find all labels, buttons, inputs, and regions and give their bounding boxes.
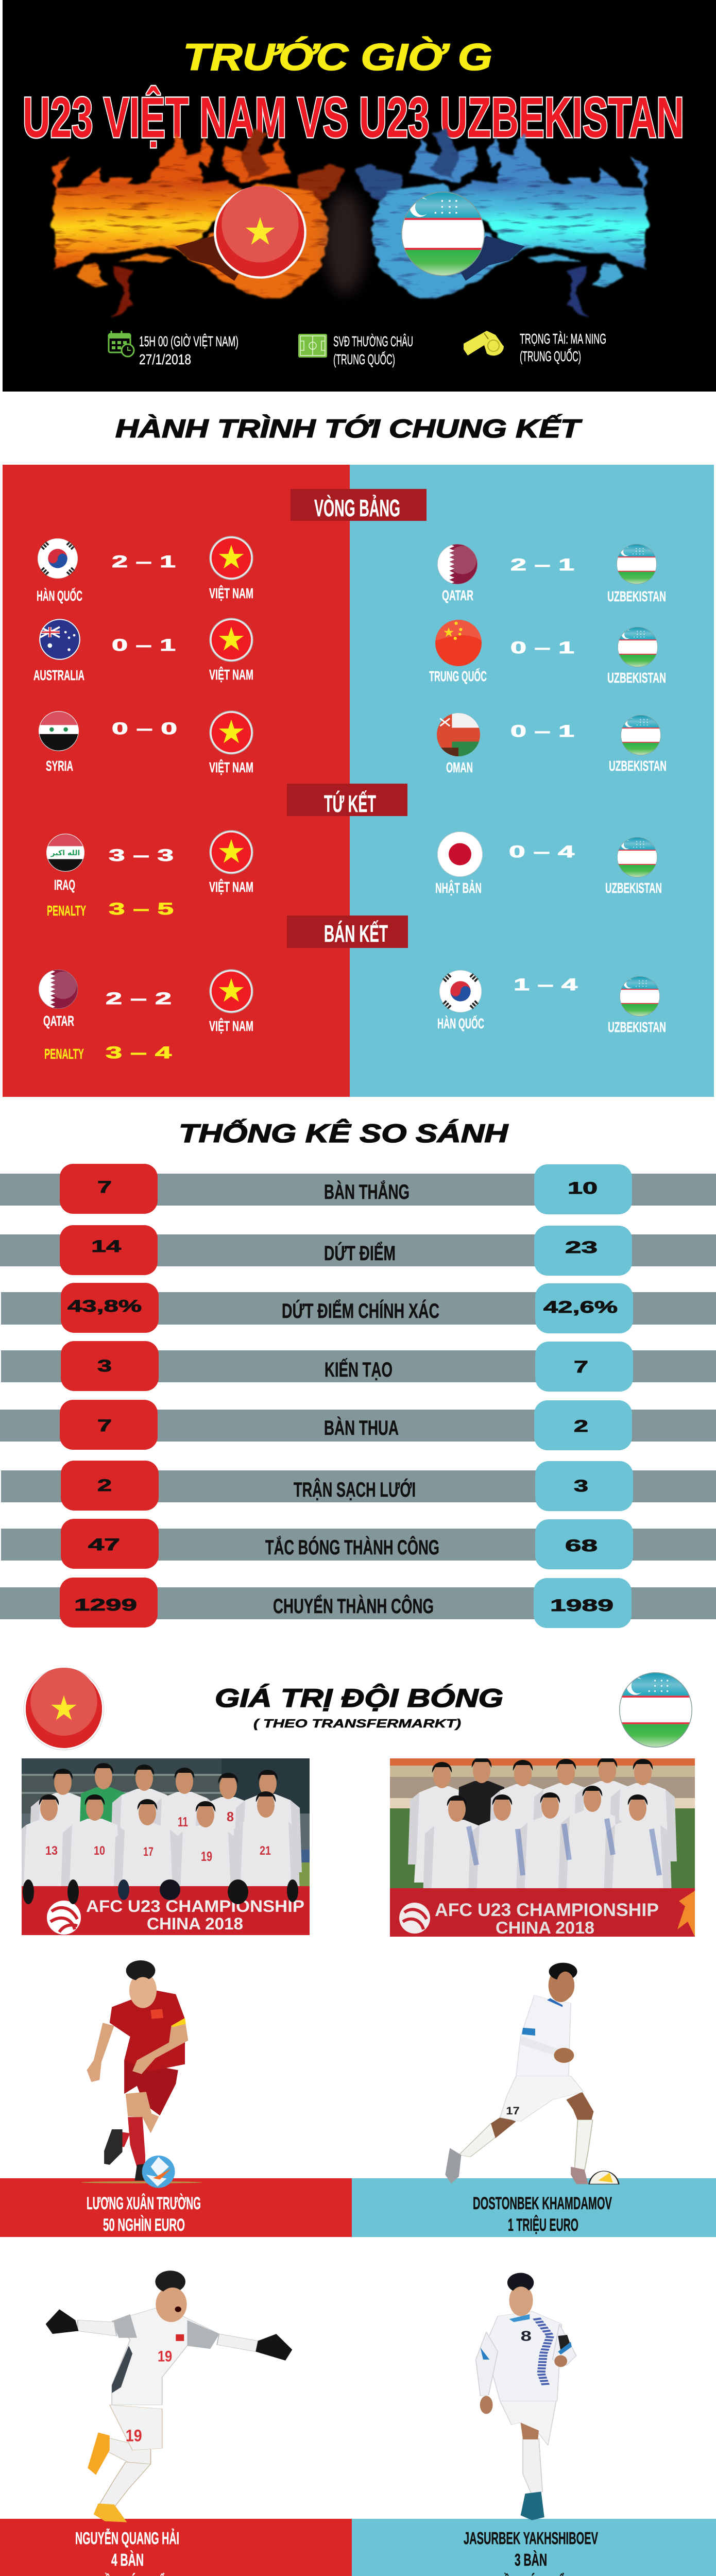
icon: calendar and clock [109, 331, 134, 357]
icon: Uzbekistan flag [401, 192, 485, 276]
stat row: shots: 14 [91, 1237, 121, 1256]
stat row: tackles: 68 [565, 1536, 598, 1555]
text: stadium: SVĐ THƯỜNG CHÂU [333, 333, 413, 349]
illustration: fire and ice fists [54, 129, 646, 315]
match: Syria vs Vietnam: SYRIA [46, 758, 73, 774]
match: Iraq vs Vietnam: PENALTY [47, 903, 86, 919]
match: Korea vs Uzbekistan: 1 – 4 [514, 975, 577, 994]
match: Korea vs Uzbekistan: HÀN QUỐC [437, 1015, 484, 1031]
match: China vs Uzbekistan: TRUNG QUỐC [429, 668, 487, 684]
stat row: goals conceded: 7 [97, 1416, 112, 1435]
panel: journey [3, 465, 714, 1097]
photo: Vietnam team: 21 [260, 1844, 271, 1858]
photo: Vietnam team: 13 [45, 1844, 58, 1858]
stat row: tackles: 47 [88, 1535, 120, 1554]
match: Qatar vs Vietnam [39, 970, 253, 1062]
subheading: source: ( THEO TRANSFERMARKT) [253, 1717, 461, 1730]
player band: Jasurbek Yakhshiboev stats: JASURBEK YAKHSHIBOEV [464, 2529, 598, 2548]
title: Trước giờ G: TRƯỚC GIỜ G [183, 37, 492, 78]
icon: Uzbekistan flag [619, 1672, 692, 1748]
match: Korea vs Vietnam [37, 536, 253, 604]
icon: football pitch [298, 334, 327, 358]
player: Jasurbek Yakhshiboev: 8 [521, 2328, 532, 2344]
photo: Vietnam team: 17 [143, 1845, 154, 1859]
match: China vs Uzbekistan [429, 620, 666, 686]
stat row: assists: 3 [97, 1357, 112, 1375]
player band: Dostonbek Khamdamov value [352, 2178, 716, 2237]
photo: Vietnam team: 11 [178, 1814, 188, 1829]
stat row: goals conceded: BÀN THUA [324, 1416, 399, 1439]
heading: journey to the final: HÀNH TRÌNH TỚI CHUNG KẾT [115, 414, 583, 443]
match: Qatar vs Vietnam: 2 – 2 [106, 989, 172, 1008]
text: stadium: (TRUNG QUỐC) [333, 351, 395, 367]
match: Korea vs Uzbekistan: UZBEKISTAN [608, 1019, 666, 1035]
stat row: goals: 10 [568, 1179, 598, 1197]
player: Jasurbek Yakhshiboev [476, 2273, 576, 2520]
match: Oman vs Uzbekistan: OMAN [446, 759, 473, 775]
text: time [139, 333, 238, 367]
icon: Vietnam flag [214, 185, 306, 279]
stat row: passes: 1989 [550, 1596, 613, 1615]
label: semi final [287, 916, 408, 948]
stat row: assists: 7 [574, 1358, 588, 1376]
banner: AFC U23: CHINA 2018 [496, 1918, 594, 1937]
text: time: 15H 00 (GIỜ VIỆT NAM) [139, 333, 238, 349]
player: Nguyễn Quang Hải: 19 [126, 2427, 142, 2445]
stat row: tackles [1, 1519, 716, 1569]
match: Qatar vs Vietnam: VIỆT NAM [209, 1018, 253, 1034]
player band: Dostonbek Khamdamov value: 1 TRIỆU EURO [508, 2215, 578, 2235]
text: referee [520, 331, 606, 364]
match: Syria vs Vietnam: 0 – 0 [112, 719, 177, 738]
match: Qatar vs Uzbekistan: 2 – 1 [510, 555, 574, 574]
player band: Lương Xuân Trường value: LƯƠNG XUÂN TRƯỜNG [87, 2194, 201, 2213]
stat row: shot accuracy: 43,8% [67, 1297, 142, 1315]
label: quarter final: TỨ KẾT [324, 790, 376, 817]
player band: Jasurbek Yakhshiboev stats: 3 BÀN [515, 2550, 547, 2569]
match: Qatar vs Vietnam: 3 – 4 [106, 1043, 172, 1062]
photo: Vietnam team [15, 1758, 310, 1935]
match: Iraq vs Vietnam: 3 – 5 [109, 900, 174, 918]
player: Nguyễn Quang Hải [46, 2270, 292, 2522]
match: Qatar vs Vietnam: PENALTY [44, 1046, 84, 1062]
photo: Vietnam team: 19 [201, 1849, 212, 1864]
text: referee: (TRUNG QUỐC) [520, 348, 581, 364]
match: Australia vs Vietnam: VIỆT NAM [209, 667, 253, 683]
stat row: tackles: TẮC BÓNG THÀNH CÔNG [265, 1535, 439, 1559]
stat row: goals conceded [0, 1400, 716, 1450]
player: Dostonbek Khamdamov [445, 1963, 619, 2184]
text: time: 27/1/2018 [139, 351, 191, 367]
player: Lương Xuân Trường [81, 1960, 202, 2188]
match: Iraq vs Vietnam: 3 – 3 [109, 846, 174, 865]
stat row: shots: 23 [565, 1238, 598, 1257]
stat row: clean sheets: TRẬN SẠCH LƯỚI [294, 1478, 416, 1501]
match: Korea vs Vietnam: HÀN QUỐC [37, 587, 82, 604]
stat row: passes: 1299 [74, 1596, 137, 1614]
match: China vs Uzbekistan: 0 – 1 [510, 638, 574, 657]
section: team value heading [24, 1667, 692, 1750]
match: Syria vs Vietnam [39, 711, 253, 775]
stat row: clean sheets: 2 [97, 1476, 112, 1495]
match: Japan vs Uzbekistan: 0 – 4 [509, 842, 574, 861]
match: Australia vs Vietnam: AUSTRALIA [33, 667, 84, 683]
match: Japan vs Uzbekistan: UZBEKISTAN [605, 880, 662, 896]
panel: statistics [0, 1164, 716, 1628]
match: Japan vs Uzbekistan: NHẬT BẢN [435, 879, 482, 896]
stat row: shots [0, 1225, 716, 1276]
banner: AFC U23: AFC U23 CHAMPIONSHIP [435, 1900, 659, 1920]
stat row: assists: KIẾN TẠO [325, 1358, 393, 1381]
match: Australia vs Vietnam [33, 618, 253, 683]
player: Dostonbek Khamdamov: 17 [506, 2105, 520, 2117]
match: Japan vs Uzbekistan [435, 832, 662, 896]
match: Oman vs Uzbekistan: UZBEKISTAN [609, 758, 667, 774]
match: China vs Uzbekistan: UZBEKISTAN [607, 670, 666, 686]
player band: Nguyễn Quang Hải stats [0, 2519, 352, 2576]
text: stadium [333, 333, 413, 367]
match: Iraq vs Vietnam [46, 831, 253, 919]
stat row: goals conceded: 2 [574, 1417, 588, 1435]
stat row: clean sheets [1, 1461, 716, 1511]
icon: whistle [464, 331, 504, 355]
heading: team value: GIÁ TRỊ ĐỘI BÓNG [215, 1683, 503, 1713]
panel: header [3, 0, 716, 392]
match: Syria vs Vietnam: VIỆT NAM [209, 759, 253, 775]
match: Australia vs Vietnam: 0 – 1 [112, 636, 176, 654]
match: Qatar vs Uzbekistan: UZBEKISTAN [607, 588, 666, 604]
player band: Dostonbek Khamdamov value: DOSTONBEK KHAMDAMOV [473, 2194, 612, 2213]
match: Oman vs Uzbekistan [437, 713, 667, 775]
stat row: goals [0, 1164, 716, 1214]
match: Korea vs Vietnam: 2 – 1 [112, 552, 176, 571]
player band: Nguyễn Quang Hải stats: NGUYỄN QUANG HẢI [75, 2529, 179, 2548]
banner: AFC U23: CHINA 2018 [147, 1914, 243, 1933]
player band: Nguyễn Quang Hải stats: 4 BÀN [111, 2550, 144, 2569]
text: referee: TRỌNG TÀI: MA NING [520, 331, 606, 347]
photo: Vietnam team: 10 [94, 1844, 105, 1858]
player band: Lương Xuân Trường value: 50 NGHÌN EURO [103, 2215, 185, 2235]
stat row: assists [1, 1341, 716, 1392]
stat row: shot accuracy [1, 1283, 716, 1333]
player: Nguyễn Quang Hải: 19 [158, 2348, 172, 2365]
stat row: shots: DỨT ĐIỂM [324, 1241, 396, 1265]
label: quarter final [287, 784, 407, 817]
stat row: shot accuracy: 42,6% [543, 1298, 618, 1316]
stat row: clean sheets: 3 [574, 1477, 588, 1495]
stat row: passes: CHUYỂN THÀNH CÔNG [273, 1594, 434, 1618]
label: group stage [291, 489, 427, 521]
label: group stage: VÒNG BẢNG [314, 495, 400, 521]
stat row: shot accuracy: DỨT ĐIỂM CHÍNH XÁC [282, 1298, 439, 1323]
banner: AFC U23: AFC U23 CHAMPIONSHIP [86, 1897, 304, 1916]
label: semi final: BÁN KẾT [324, 920, 388, 947]
photo: Uzbekistan team [390, 1757, 695, 1937]
icon: Vietnam flag [24, 1667, 104, 1750]
match: Qatar vs Uzbekistan: QATAR [442, 587, 473, 603]
banner: AFC U23 [390, 1888, 695, 1937]
photo: Vietnam team: 8 [227, 1809, 234, 1824]
player band: Jasurbek Yakhshiboev stats [352, 2519, 716, 2576]
match: Korea vs Vietnam: VIỆT NAM [209, 585, 253, 601]
match: Iraq vs Vietnam: IRAQ [54, 877, 75, 893]
match: Oman vs Uzbekistan: 0 – 1 [510, 722, 574, 740]
heading: statistics comparison: THỐNG KÊ SO SÁNH [179, 1118, 508, 1148]
banner: AFC U23 [22, 1886, 310, 1935]
player band: Lương Xuân Trường value [0, 2178, 352, 2237]
stat row: passes [0, 1578, 716, 1628]
stat row: goals: 7 [97, 1178, 112, 1196]
match: Qatar vs Vietnam: QATAR [43, 1013, 74, 1029]
match: Iraq vs Vietnam: VIỆT NAM [209, 879, 253, 895]
match: Qatar vs Uzbekistan [437, 544, 666, 604]
match: Korea vs Uzbekistan [437, 970, 666, 1035]
stat row: goals: BÀN THẮNG [324, 1180, 410, 1204]
